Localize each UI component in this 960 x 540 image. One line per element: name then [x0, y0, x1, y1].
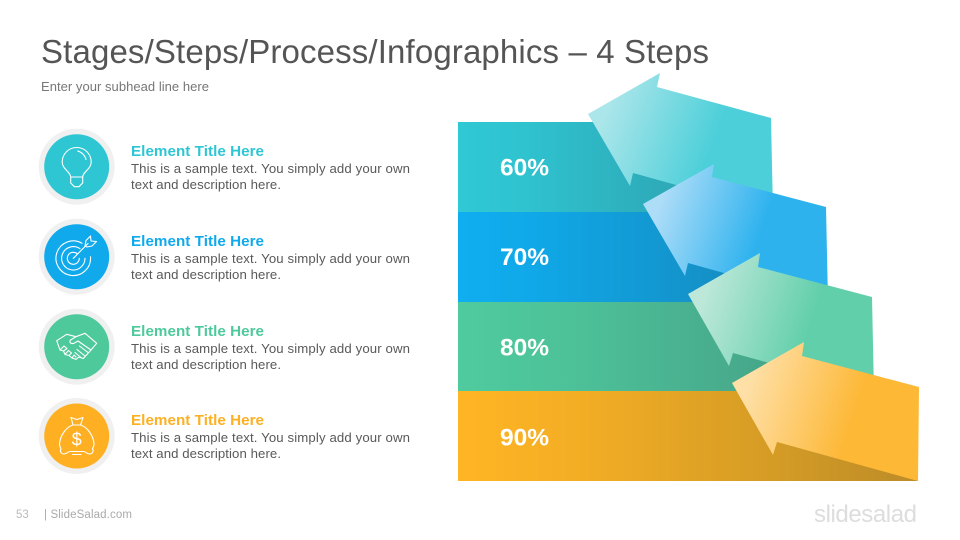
percentage: 70% — [500, 244, 549, 271]
icon: handshake — [39, 309, 115, 385]
band — [458, 122, 772, 212]
list item 1: idea — [39, 129, 410, 205]
arrow — [688, 253, 874, 392]
icon: target with arrow — [39, 219, 115, 295]
percentage: 90% — [500, 424, 549, 452]
arrow — [643, 164, 828, 302]
item text: This is a sample text. You simply add your own — [131, 251, 410, 266]
item title: Element Title Here — [131, 143, 264, 160]
list item 4: money bag — [39, 398, 410, 474]
title: Stages/Steps/Process/Infographics – 4 Steps — [41, 33, 709, 70]
stage 2: 70% band and arrow — [458, 164, 828, 302]
footer page number: 53 — [16, 509, 29, 521]
item title: Element Title Here — [131, 323, 264, 340]
item text: This is a sample text. You simply add your own — [131, 161, 410, 176]
list item 3: handshake: text and description here. — [131, 357, 281, 372]
logo wordmark: slidesalad — [814, 501, 917, 528]
stage 1: 60% band and arrow — [458, 73, 773, 212]
arrow — [588, 73, 773, 212]
percentage: 80% — [500, 334, 549, 362]
percentage: 60% — [500, 154, 549, 182]
subhead: Enter your subhead line here — [41, 79, 209, 94]
list item 4: money bag: text and description here. — [131, 446, 281, 461]
stage 3: 80% band and arrow — [458, 253, 874, 392]
item title: Element Title Here — [131, 412, 264, 429]
icon: light bulb — [39, 129, 115, 205]
band — [458, 391, 918, 481]
icon: money bag: $ — [72, 430, 82, 450]
list item 2: target — [39, 219, 410, 295]
list item 3: handshake — [39, 309, 410, 385]
arrow — [732, 342, 919, 481]
icon: money bag — [39, 398, 115, 474]
item text: This is a sample text. You simply add your own — [131, 341, 410, 356]
item text: This is a sample text. You simply add your own — [131, 430, 410, 445]
list item 2: target: text and description here. — [131, 267, 281, 282]
band — [458, 212, 827, 302]
stage 4: 90% band and arrow — [458, 342, 919, 481]
footer site name: | SlideSalad.com — [44, 509, 132, 521]
item title: Element Title Here — [131, 233, 264, 250]
band — [458, 302, 873, 391]
list item 1: idea: text and description here. — [131, 177, 281, 192]
